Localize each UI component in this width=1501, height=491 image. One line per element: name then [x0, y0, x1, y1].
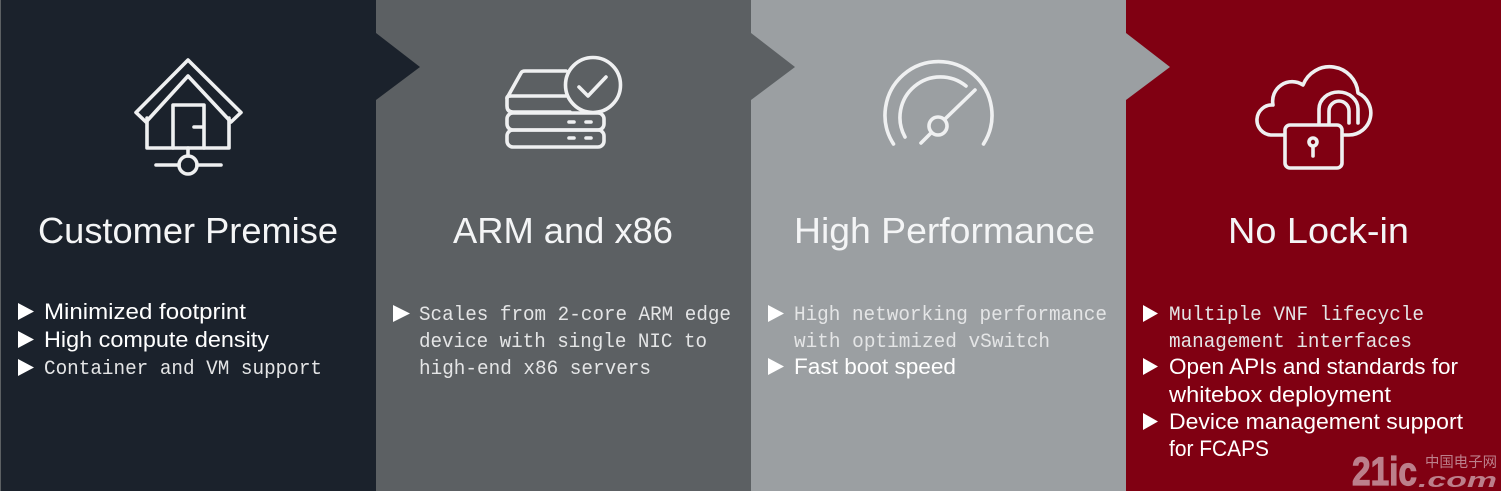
icon: server stack with check mark [507, 58, 620, 147]
bullet list: no lock-in: Device management support [1169, 409, 1463, 434]
panel: arm and x86 [376, 0, 751, 491]
bullet list: high performance: Fast boot speed [794, 354, 956, 379]
panel: high performance [751, 0, 1126, 491]
panel: no lock-in [1126, 0, 1501, 491]
watermark: 21ic [1352, 450, 1497, 491]
bullet list: high performance: High networking performance [794, 304, 1107, 327]
icon: networked house [136, 60, 241, 174]
heading: customer premise: Customer Premise [38, 210, 338, 251]
bullet list: customer premise [18, 299, 322, 381]
arrow: customer premise to arm and x86 [376, 33, 420, 100]
bullet list: no lock-in: Open APIs and standards for [1169, 354, 1458, 379]
heading: arm and x86: ARM and x86 [453, 210, 673, 251]
bullet list: high performance: with optimized vSwitch [794, 331, 1050, 354]
arrow: high performance to no lock-in [1126, 33, 1170, 100]
bullet list: arm and x86: device with single NIC to [419, 331, 707, 354]
icon: cloud with padlock [1257, 67, 1371, 168]
bullet list: high performance [768, 304, 1107, 379]
bullet list: customer premise: Minimized footprint [44, 299, 246, 324]
bullet list: customer premise: Container and VM support [44, 358, 322, 381]
bullet list: no lock-in: whitebox deployment [1168, 382, 1391, 407]
heading: no lock-in: No Lock-in [1228, 210, 1409, 251]
bullet list: arm and x86: high-end x86 servers [419, 358, 651, 381]
bullet list: no lock-in: management interfaces [1169, 331, 1412, 354]
bullet list: customer premise: High compute density [44, 327, 269, 352]
bullet list: no lock-in: for FCAPS [1169, 436, 1269, 461]
bullet list: arm and x86 [393, 304, 731, 381]
bullet list: no lock-in: Multiple VNF lifecycle [1169, 304, 1424, 327]
arrow: arm and x86 to high performance [751, 33, 795, 100]
bullet list: no lock-in [1143, 304, 1463, 461]
icon: speedometer [885, 62, 992, 144]
bullet list: arm and x86: Scales from 2-core ARM edge [419, 304, 731, 327]
panel: customer premise [0, 0, 376, 491]
heading: high performance: High Performance [794, 210, 1095, 251]
watermark: 21ic: 中国电子网 [1425, 454, 1497, 471]
